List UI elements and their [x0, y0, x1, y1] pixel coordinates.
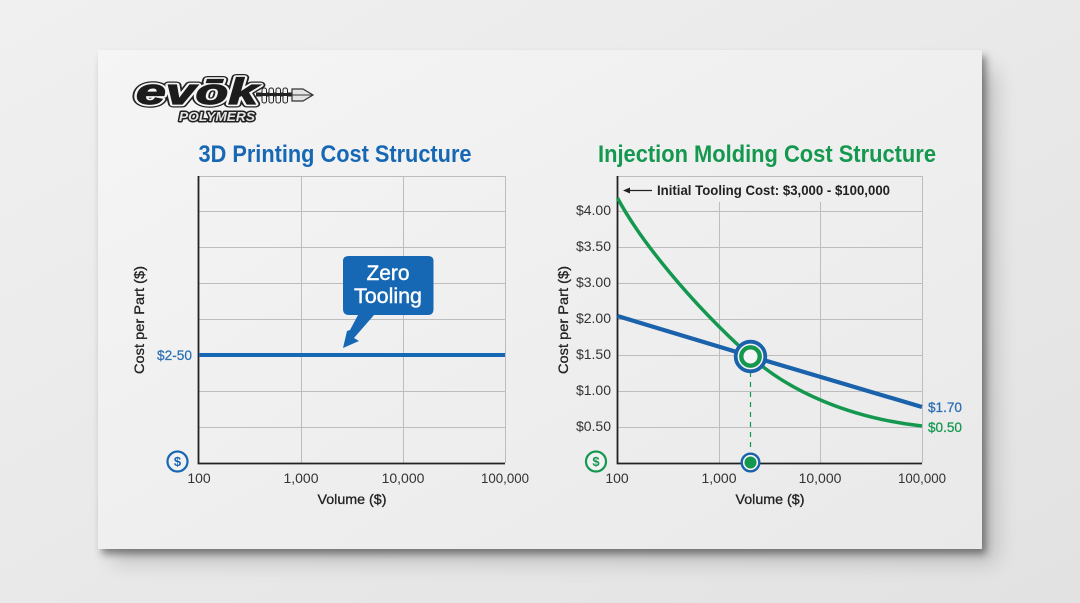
x tick labels: 10,000: [799, 470, 842, 486]
logo: evok polymers: evōk: [136, 71, 261, 112]
callout: zero tooling: [343, 256, 434, 348]
callout: zero tooling: Tooling: [354, 285, 422, 308]
chart: injection molding cost: [555, 176, 962, 507]
chart: 3D printing cost: [131, 176, 529, 507]
heading: injection molding: Injection Molding Cost Structure: [598, 141, 936, 168]
axis title: cost: Cost per Part ($): [131, 266, 147, 374]
axis title: volume: Volume ($): [736, 491, 804, 507]
x tick labels: 100: [187, 470, 211, 486]
axis title: cost: Cost per Part ($): [555, 266, 571, 374]
logo: evok polymers: evōk: [136, 71, 261, 112]
icon: dollar: $: [592, 454, 600, 469]
x tick labels: [605, 470, 946, 486]
x tick labels: 100: [605, 470, 629, 486]
label: blue end value: $1.70: [928, 399, 962, 415]
x tick labels: 10,000: [382, 470, 425, 486]
y tick labels: $1.00: [576, 382, 611, 398]
x tick labels: [187, 470, 529, 486]
logo: evok polymers: [136, 71, 313, 124]
x tick labels: 1,000: [283, 470, 319, 486]
y tick labels: [576, 202, 611, 434]
y tick labels: $1.50: [576, 346, 611, 362]
y tick labels: $2.00: [576, 310, 611, 326]
y tick labels: $0.50: [576, 418, 611, 434]
blue curve: [618, 316, 922, 407]
icon: dollar: $: [174, 454, 182, 469]
x tick labels: 1,000: [701, 470, 737, 486]
logo: evok polymers: POLYMERS: [179, 109, 255, 124]
y tick labels: $4.00: [576, 202, 611, 218]
logo: evok polymers: POLYMERS: [179, 109, 255, 124]
y tick labels: $3.00: [576, 274, 611, 290]
axis marker: [742, 454, 759, 471]
label: green end value: $0.50: [928, 419, 962, 435]
green curve: [618, 198, 922, 426]
y tick labels: $3.50: [576, 238, 611, 254]
value label: $2-50: [157, 347, 192, 363]
flat cost line: [199, 353, 505, 357]
tooling cost note: Initial Tooling Cost: $3,000 - $100,000: [657, 183, 890, 198]
panel: report card: [98, 50, 982, 549]
icon: dollar: [586, 452, 606, 472]
axis title: volume: Volume ($): [318, 491, 386, 507]
icon: dollar: [168, 452, 188, 472]
x tick labels: 100,000: [481, 470, 529, 486]
heading: 3D printing: 3D Printing Cost Structure: [198, 141, 472, 168]
logo: evok polymers: evōk: [136, 71, 261, 112]
break-even marker: [736, 342, 765, 371]
break-even dashed line: [750, 372, 752, 452]
x tick labels: 100,000: [898, 470, 946, 486]
callout: zero tooling: Zero: [366, 262, 410, 285]
